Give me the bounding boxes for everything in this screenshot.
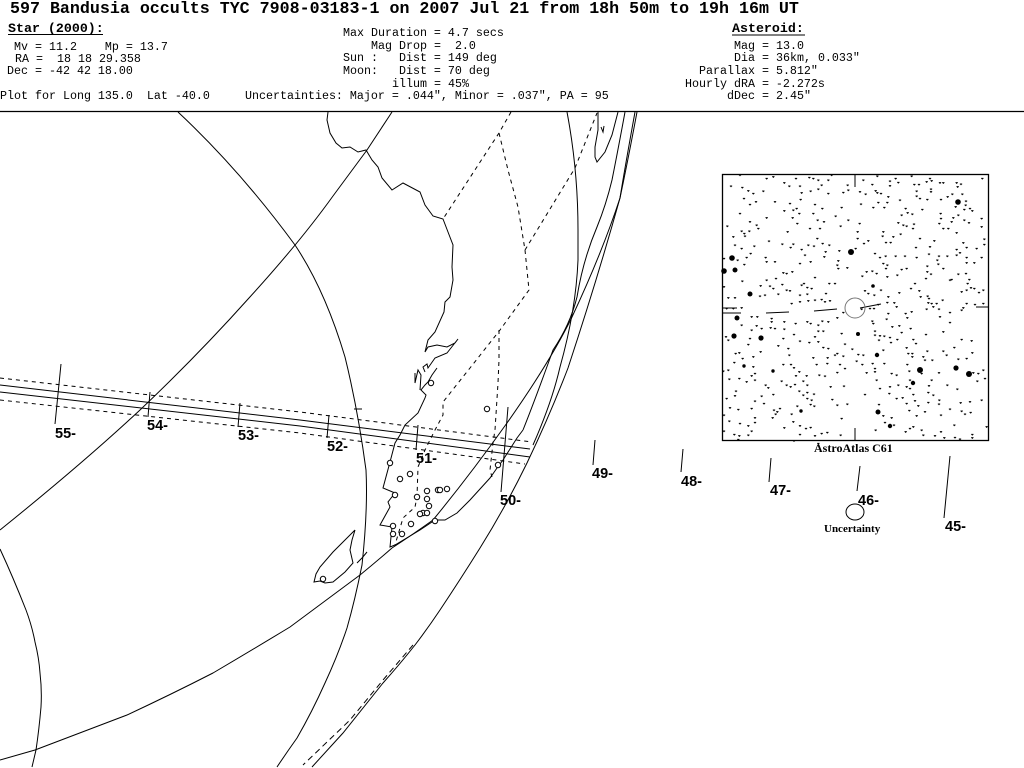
coastline: island — [314, 530, 367, 583]
asteroid data block: Hourly dRA = -2.272s — [685, 77, 825, 91]
asteroid data block: Parallax = 5.812" — [699, 64, 818, 78]
coastline: mainland — [327, 112, 625, 547]
uncertainty ellipse — [846, 504, 864, 520]
uncertainty caption: Uncertainty — [824, 523, 881, 535]
event data block — [343, 26, 504, 91]
faint stars, lower left — [723, 308, 852, 443]
occultation path: centre limits — [0, 385, 530, 457]
event data block: Moon: Dist = 70 deg — [343, 64, 490, 78]
event data block: illum = 45% — [392, 77, 469, 91]
event data block: Max Duration = 4.7 secs — [343, 26, 504, 40]
time labels: 52- — [327, 439, 348, 455]
star data block — [7, 21, 168, 78]
occultation path: uncertainty limits — [0, 378, 532, 464]
event data block: Sun : Dist = 149 deg — [343, 51, 497, 65]
time ticks — [55, 364, 950, 518]
asteroid track — [723, 175, 988, 440]
uncertainties: Uncertainties: Major = .044", Minor = .037", PA = 95 — [245, 89, 609, 103]
asteroid data block — [685, 21, 860, 103]
star data block: RA = 18 18 29.358 — [15, 52, 141, 66]
asteroid heading: Asteroid: — [732, 21, 804, 36]
time labels: 55- — [55, 426, 76, 442]
star data block: Mv = 11.2 Mp = 13.7 — [14, 40, 168, 54]
state borders — [395, 112, 597, 545]
time labels: 45- — [945, 519, 966, 535]
time labels: 46- — [858, 493, 879, 509]
chart caption: AstroAtlas C61 — [814, 441, 893, 455]
asteroid data block: Dia = 36km, 0.033" — [734, 51, 860, 65]
asteroid data block: dDec = 2.45" — [727, 89, 811, 103]
time labels: 54- — [147, 418, 168, 434]
star chart — [721, 174, 988, 443]
bright stars — [721, 199, 972, 428]
star data block: Dec = -42 42 18.00 — [7, 64, 133, 78]
target star marker — [845, 298, 865, 318]
faint stars, upper right — [856, 176, 984, 304]
time labels: 47- — [770, 483, 791, 499]
time labels: 50- — [500, 493, 521, 509]
time labels: 49- — [592, 466, 613, 482]
faint stars, lower right — [857, 307, 987, 439]
header rule — [0, 110, 1024, 112]
time labels: 51- — [416, 451, 437, 467]
time labels: 53- — [238, 428, 259, 444]
time labels — [55, 418, 966, 535]
plot location: Plot for Long 135.0 Lat -40.0 — [0, 89, 210, 103]
chart frame — [722, 174, 988, 440]
event data block: Mag Drop = 2.0 — [371, 39, 476, 53]
faint stars, upper left — [724, 175, 848, 303]
asteroid data block: Mag = 13.0 — [734, 39, 804, 53]
observer stations — [320, 380, 501, 582]
time labels: 48- — [681, 474, 702, 490]
sunlight and limb curves — [0, 112, 637, 767]
star heading: Star (2000): — [8, 21, 104, 36]
